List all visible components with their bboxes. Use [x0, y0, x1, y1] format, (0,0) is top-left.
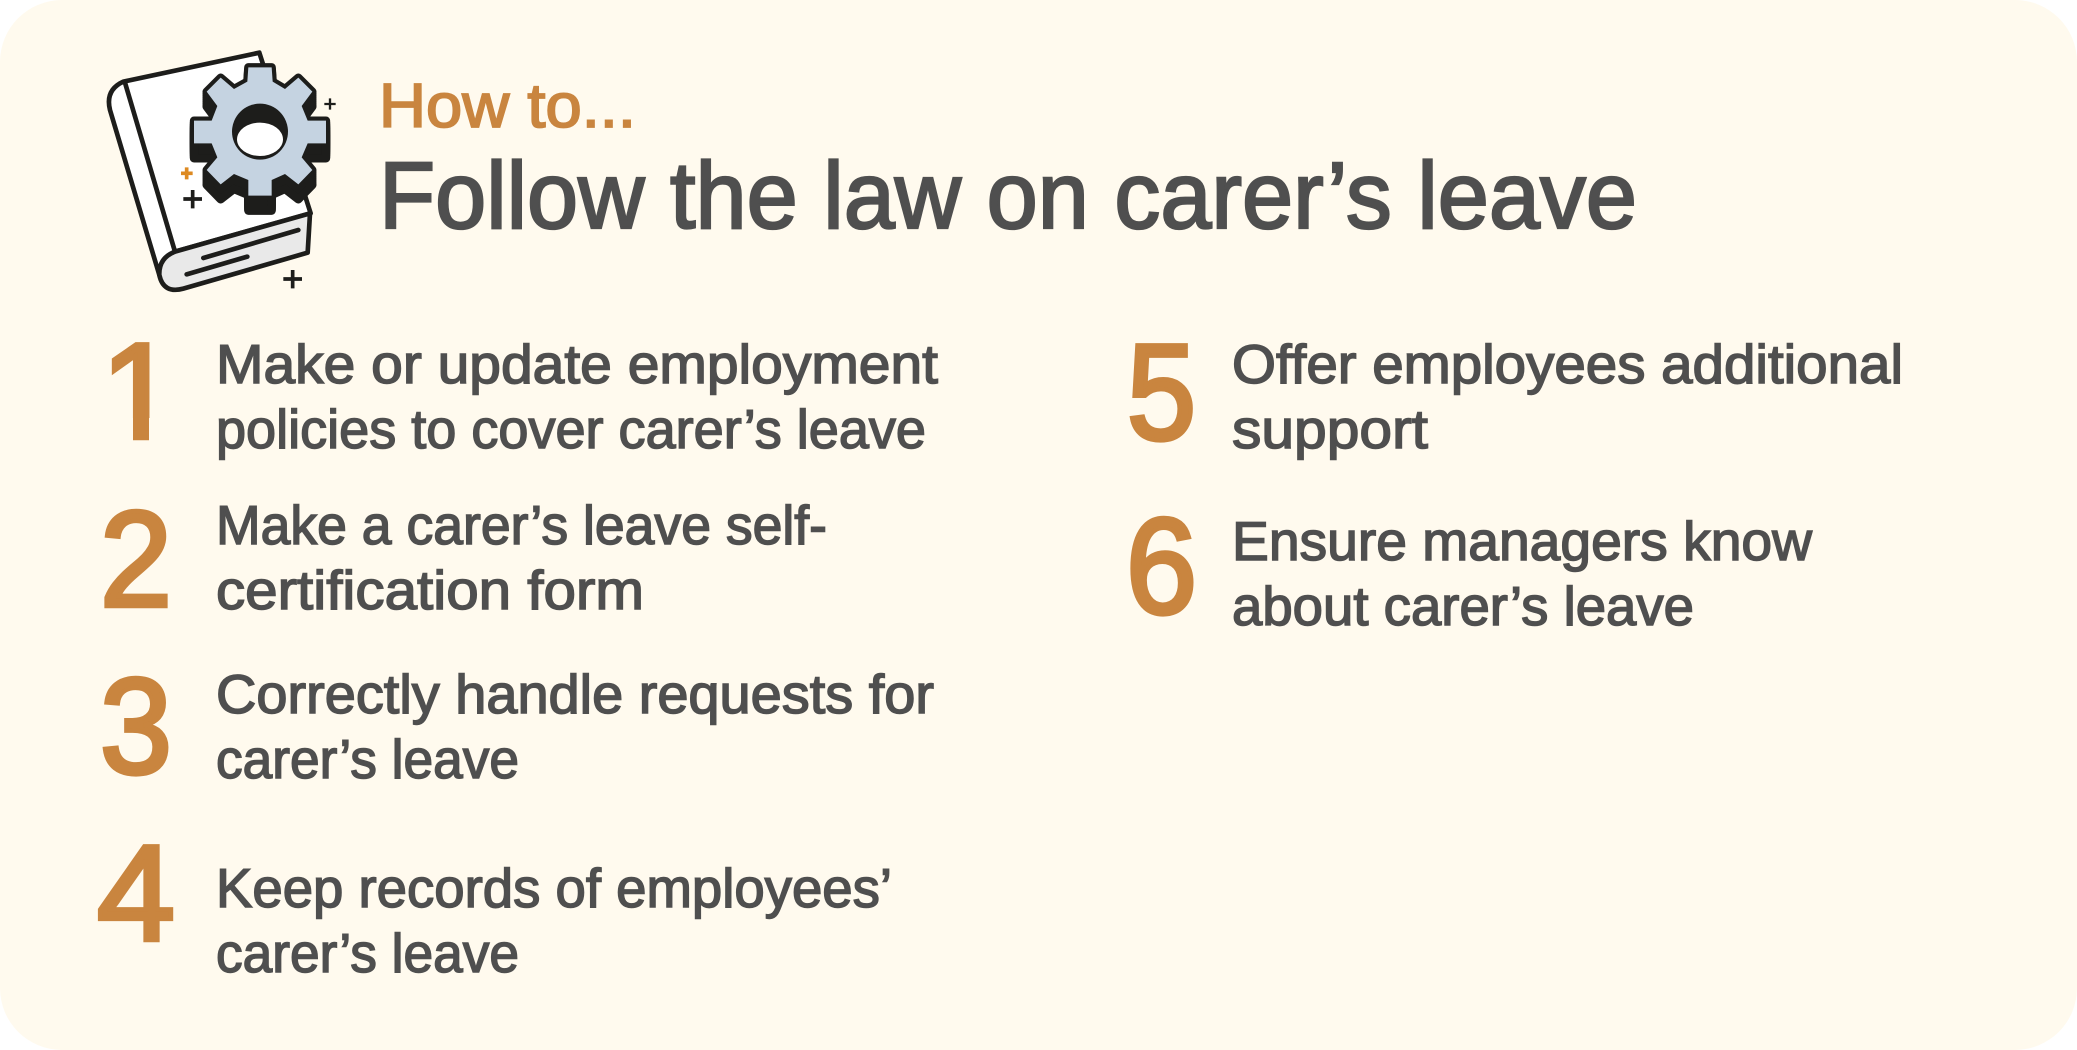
step 5: support	[1232, 398, 1428, 460]
step 6: 6	[1126, 490, 1197, 642]
step 4: carer’s leave	[216, 922, 519, 984]
icon: book with gear	[109, 53, 336, 290]
step 4: 4	[97, 817, 175, 969]
step 3: 3	[100, 650, 172, 802]
step 3: Correctly handle requests for	[216, 663, 934, 725]
step 2	[100, 483, 827, 635]
step 4: Keep records of employees’	[216, 857, 892, 919]
step 6: Ensure managers know	[1232, 510, 1812, 572]
step 1: policies to cover carer’s leave	[216, 398, 926, 460]
step 2: certification form	[216, 559, 644, 621]
step 6	[1126, 490, 1812, 642]
step 1	[95, 315, 938, 467]
step 5: Offer employees additional	[1232, 333, 1903, 395]
step 4	[97, 817, 892, 984]
title: Follow the law on carer’s leave	[379, 143, 1637, 249]
step 5: 5	[1127, 316, 1196, 468]
step 6: about carer’s leave	[1232, 575, 1694, 637]
step 3	[100, 650, 934, 802]
step 2: Make a carer’s leave self-	[216, 494, 827, 556]
step 2: 2	[100, 483, 172, 635]
step 3: carer’s leave	[216, 728, 519, 790]
step 1: Make or update employment	[216, 333, 938, 395]
step 5	[1127, 316, 1903, 468]
step 1: 1	[101, 315, 177, 467]
heading: how to: How to...	[379, 72, 636, 141]
